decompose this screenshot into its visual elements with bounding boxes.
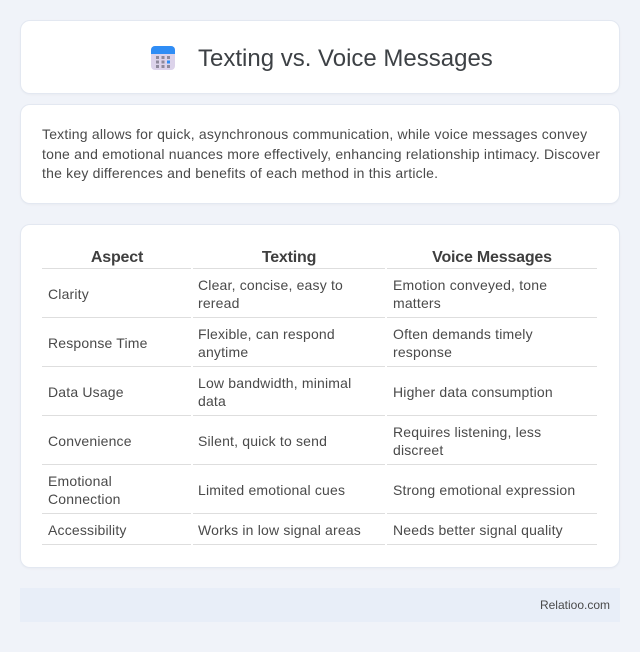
row: accessibility: Accessibility: [48, 522, 127, 538]
row: emotional connection: Connection: [48, 491, 121, 507]
row: emotional connection: Strong emotional expression: [393, 482, 575, 498]
row: accessibility: Works in low signal areas: [198, 522, 361, 538]
row: clarity: reread: [198, 295, 240, 311]
row: convenience: Convenience: [48, 433, 132, 449]
intro paragraph: [42, 126, 600, 181]
row: emotional connection: Limited emotional cues: [198, 482, 345, 498]
table header: Texting: [262, 249, 316, 266]
row: data usage: Higher data consumption: [393, 384, 553, 400]
row: response time: [48, 326, 533, 360]
intro paragraph: the key differences and benefits of each method in this article.: [42, 165, 438, 181]
table header: Voice Messages: [432, 249, 552, 266]
row: clarity: Clear, concise, easy to: [198, 277, 343, 293]
row: convenience: discreet: [393, 442, 443, 458]
icon: calendar: [151, 46, 175, 70]
row: response time: response: [393, 344, 452, 360]
row: clarity: matters: [393, 295, 441, 311]
title: Texting vs. Voice Messages: [198, 45, 493, 72]
row: accessibility: Needs better signal quality: [393, 522, 563, 538]
table header: [91, 249, 552, 266]
row: data usage: data: [198, 393, 226, 409]
row: response time: Often demands timely: [393, 326, 533, 342]
row: response time: Flexible, can respond: [198, 326, 335, 342]
row: response time: anytime: [198, 344, 248, 360]
row: convenience: [48, 424, 541, 458]
row: convenience: Silent, quick to send: [198, 433, 327, 449]
panel: intro text: [20, 104, 620, 204]
row: response time: Response Time: [48, 335, 148, 351]
row: accessibility: [48, 522, 563, 538]
row: emotional connection: [48, 473, 575, 507]
footer credit: Relatioo.com: [540, 598, 610, 612]
panel: header: [20, 20, 620, 94]
row: emotional connection: Emotional: [48, 473, 112, 489]
intro paragraph: Texting allows for quick, asynchronous communication, while voice messages convey: [42, 126, 587, 142]
intro paragraph: tone and emotional nuances more effectively, enhancing relationship intimacy. Discover: [42, 146, 600, 162]
row: clarity: Clarity: [48, 286, 89, 302]
row: clarity: Emotion conveyed, tone: [393, 277, 547, 293]
row: data usage: [48, 375, 553, 409]
row: data usage: Data Usage: [48, 384, 124, 400]
row: data usage: Low bandwidth, minimal: [198, 375, 351, 391]
row: convenience: Requires listening, less: [393, 424, 541, 440]
table header: Aspect: [91, 249, 143, 266]
panel: comparison table: [20, 224, 620, 568]
row: clarity: [48, 277, 547, 311]
footer: [20, 588, 620, 622]
